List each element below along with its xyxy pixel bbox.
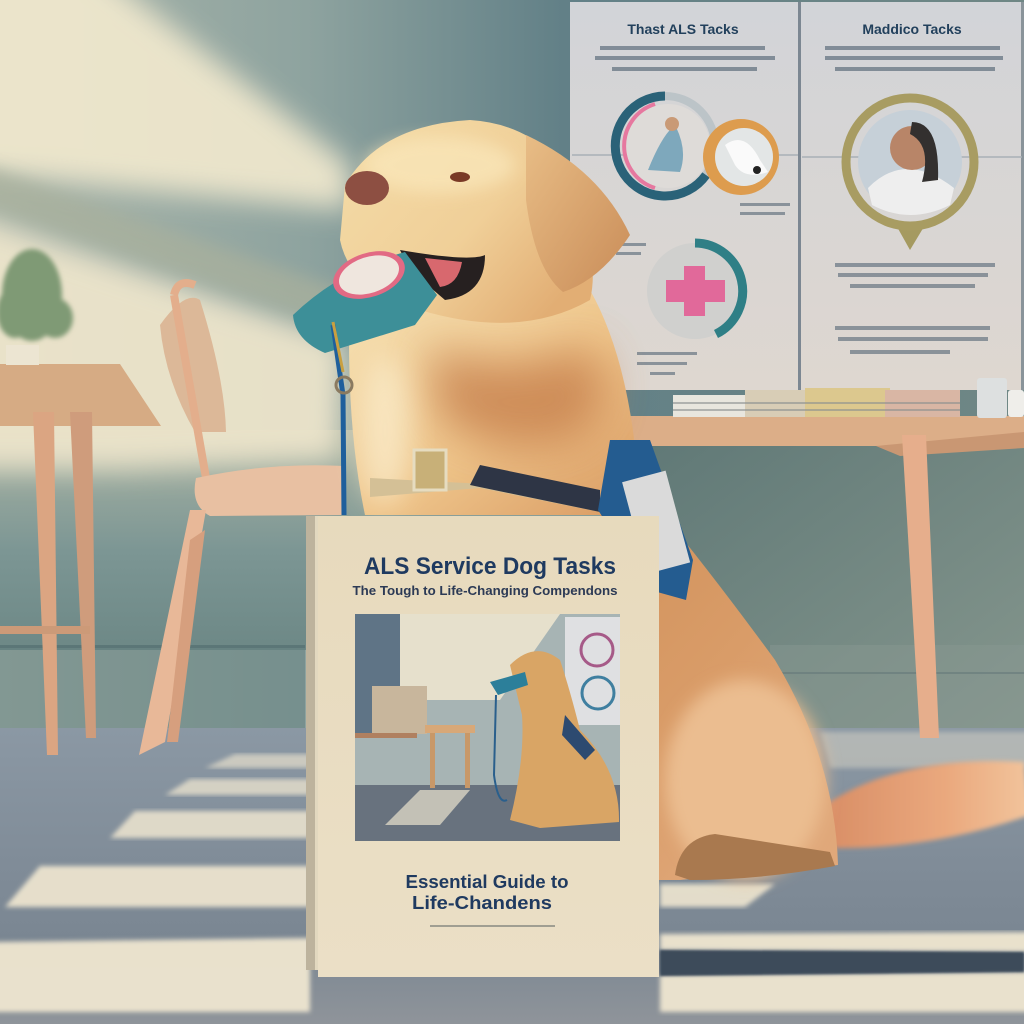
book spine: [306, 516, 326, 970]
cover picture dog: [510, 651, 619, 828]
poster body text bars: [595, 46, 1003, 71]
dog shoulder shading: [430, 345, 604, 446]
poster heading left: Thast ALS Tacks: [627, 21, 739, 37]
dog rear paw: [675, 834, 835, 880]
dog haunch: [665, 680, 825, 880]
mugs: [977, 378, 1024, 418]
floor: [0, 728, 1024, 1024]
plant: [0, 249, 73, 365]
light shafts on wall: [0, 0, 350, 470]
dog chest: [349, 290, 640, 515]
books on right table: [673, 388, 960, 417]
poster: tasks: [570, 2, 1024, 390]
dog: [293, 120, 1024, 880]
poster map pin portrait: [846, 98, 974, 250]
book cover picture: [355, 614, 620, 841]
book: [306, 516, 659, 977]
book guide text: Essential Guide to: [406, 872, 568, 892]
floor shadow beside book: [660, 950, 1024, 976]
poster ring icon: person: [615, 96, 715, 196]
harness strap: [470, 465, 600, 512]
book fine print: [430, 925, 555, 927]
leash: [333, 325, 344, 515]
right table: [630, 416, 1024, 738]
lower left wall: [0, 430, 640, 650]
poster ring icon: dog: [703, 119, 779, 195]
dog chest light: [360, 355, 410, 505]
floor light strips: [0, 732, 1024, 1012]
book cover: [318, 516, 659, 977]
chair: [139, 283, 345, 755]
poster heading right: Maddico Tacks: [862, 21, 962, 37]
toy pouch: [293, 252, 437, 353]
collar: [370, 478, 600, 512]
poster medical cross icon: [647, 243, 743, 339]
skirting board: [0, 645, 1024, 730]
book: Life-Chandens: [412, 893, 552, 913]
dog eye: [450, 172, 470, 182]
book subtitle: The Tough to Life-Changing Compendons: [352, 583, 618, 598]
right wall below table: [630, 440, 1024, 730]
dog ear: [526, 135, 630, 292]
dog head: [340, 120, 593, 323]
left table: [0, 364, 161, 755]
wall: [0, 0, 1024, 730]
dog nose: [345, 171, 389, 205]
dog body: [600, 440, 838, 880]
dog mouth: [400, 250, 485, 300]
poster lower text bars: [616, 203, 995, 375]
dog forehead light: [365, 137, 515, 193]
book title: ALS Service Dog Tasks: [364, 553, 616, 580]
dog tail: [825, 761, 1024, 848]
vest: [598, 440, 693, 600]
